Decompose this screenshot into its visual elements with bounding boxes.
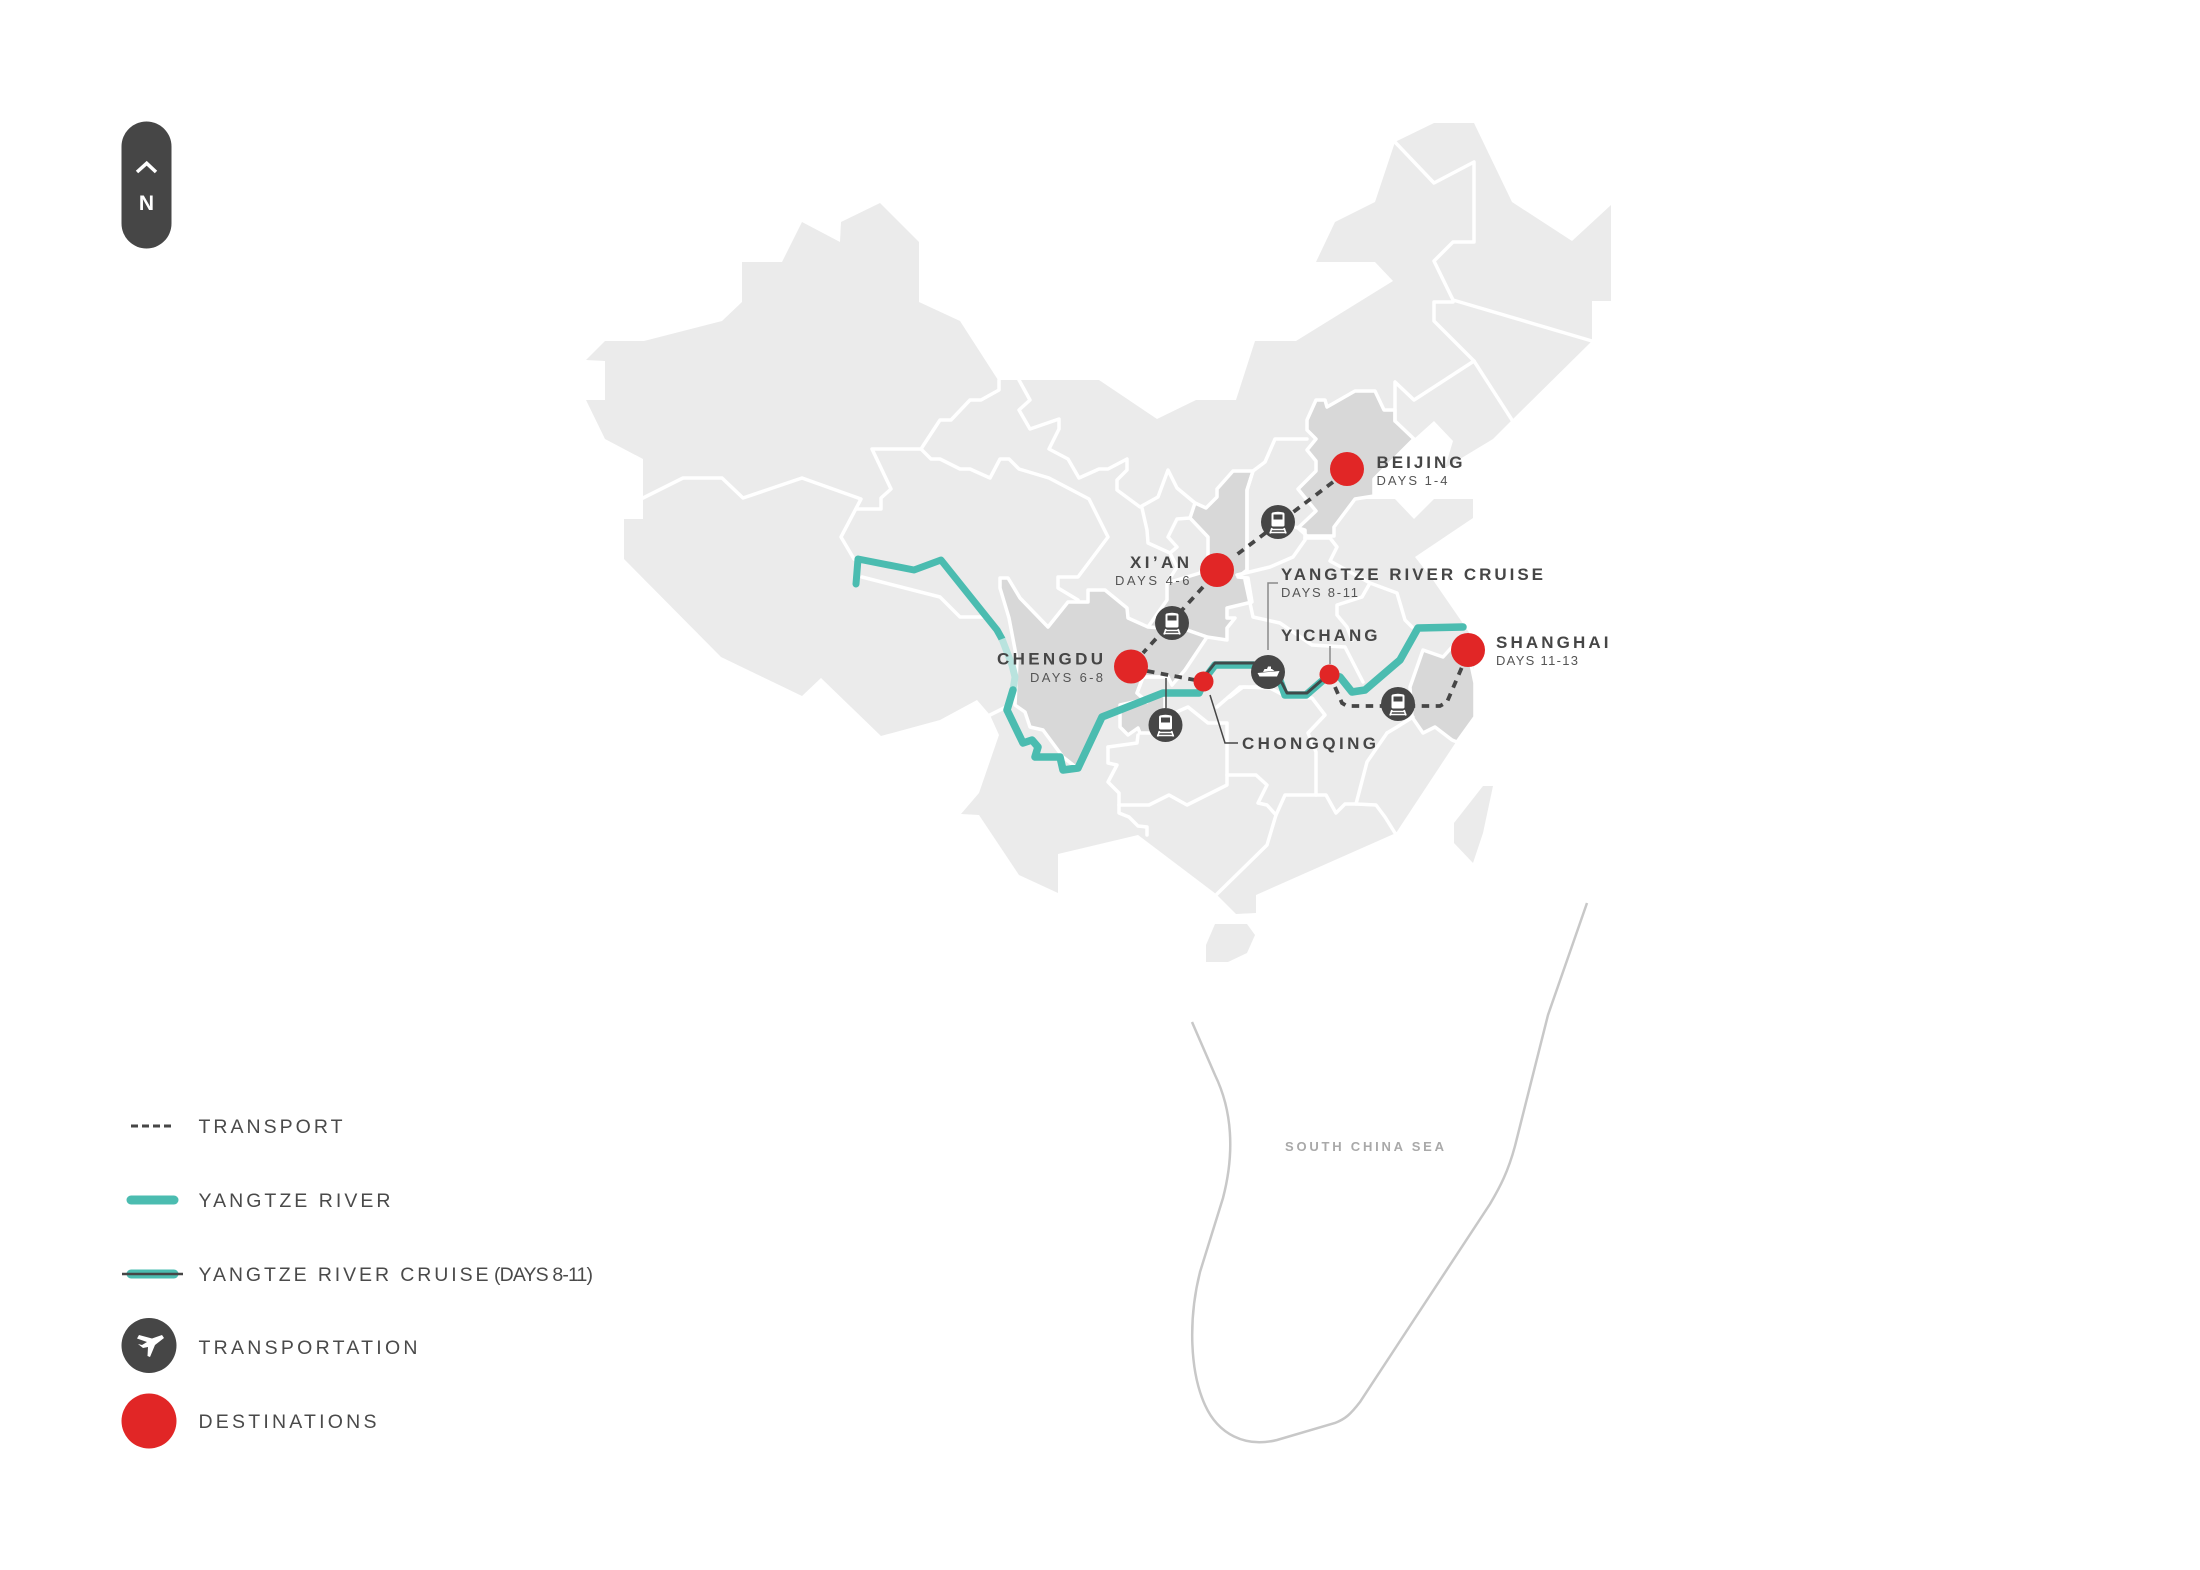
transport routes bbox=[1143, 482, 1462, 706]
mainland landmass bbox=[586, 123, 1611, 914]
legend: Yangtze River Cruise: YANGTZE RIVER CRUISE bbox=[198, 1264, 488, 1286]
icon: train Xi'an-Chengdu bbox=[1155, 606, 1189, 640]
legend: Yangtze River Cruise bbox=[122, 1264, 593, 1286]
legend: transport: TRANSPORT bbox=[198, 1116, 343, 1138]
destination: Shanghai: DAYS 11-13 bbox=[1496, 653, 1578, 668]
destination: Xi'an bbox=[1115, 553, 1234, 588]
destination: Yichang bbox=[1281, 626, 1378, 684]
legend bbox=[122, 1116, 593, 1448]
icon: cruise ship bbox=[1251, 655, 1285, 689]
legend: destinations bbox=[122, 1394, 376, 1448]
destination: Chongqing: CHONGQING bbox=[1242, 734, 1376, 753]
destination: Beijing: DAYS 1-4 bbox=[1376, 473, 1448, 488]
destination: Beijing: BEIJING bbox=[1376, 453, 1462, 472]
Hainan bbox=[1206, 924, 1255, 962]
destination: Shanghai bbox=[1451, 633, 1608, 668]
map: China provinces bbox=[586, 123, 1611, 962]
province borders bbox=[643, 142, 1592, 894]
Taiwan bbox=[1454, 786, 1493, 863]
legend: Yangtze River Cruise: (DAYS 8-11) bbox=[494, 1264, 593, 1286]
destination: Chengdu: DAYS 6-8 bbox=[1030, 670, 1103, 685]
legend: Yangtze River: YANGTZE RIVER bbox=[198, 1190, 390, 1212]
compass: north pill: N bbox=[139, 192, 154, 215]
legend: transportation bbox=[122, 1318, 418, 1373]
Yangtze River bbox=[856, 559, 1463, 770]
destination: Chengdu: CHENGDU bbox=[997, 650, 1103, 668]
highlighted provinces bbox=[1000, 391, 1475, 768]
leader lines bbox=[1166, 583, 1330, 743]
destination: Beijing bbox=[1330, 452, 1462, 488]
label: Yangtze River Cruise: DAYS 8-11 bbox=[1281, 585, 1358, 600]
compass: north pill bbox=[122, 122, 172, 248]
legend: transportation: TRANSPORTATION bbox=[198, 1337, 418, 1359]
icon: train Beijing-Xi'an bbox=[1261, 505, 1295, 539]
label: Yangtze River Cruise bbox=[1281, 565, 1543, 600]
Yangtze River Cruise bbox=[1207, 663, 1254, 673]
destination: Chongqing bbox=[1194, 672, 1376, 753]
destination: Yichang: YICHANG bbox=[1281, 626, 1378, 645]
label: Yangtze River Cruise: YANGTZE RIVER CRUISE bbox=[1281, 565, 1543, 584]
destination: Shanghai: SHANGHAI bbox=[1496, 633, 1608, 652]
icon: train Yichang-Shanghai bbox=[1381, 687, 1415, 721]
destination: Xi'an: DAYS 4-6 bbox=[1115, 573, 1190, 588]
icon: train Chengdu-Chongqing bbox=[1148, 708, 1182, 742]
destination: Xi'an: XI’AN bbox=[1130, 553, 1189, 572]
legend: destinations: DESTINATIONS bbox=[198, 1411, 376, 1433]
destination: Chengdu bbox=[997, 650, 1148, 685]
label: South China Sea: SOUTH CHINA SEA bbox=[1285, 1139, 1445, 1154]
South China Sea boundary bbox=[1192, 903, 1587, 1442]
